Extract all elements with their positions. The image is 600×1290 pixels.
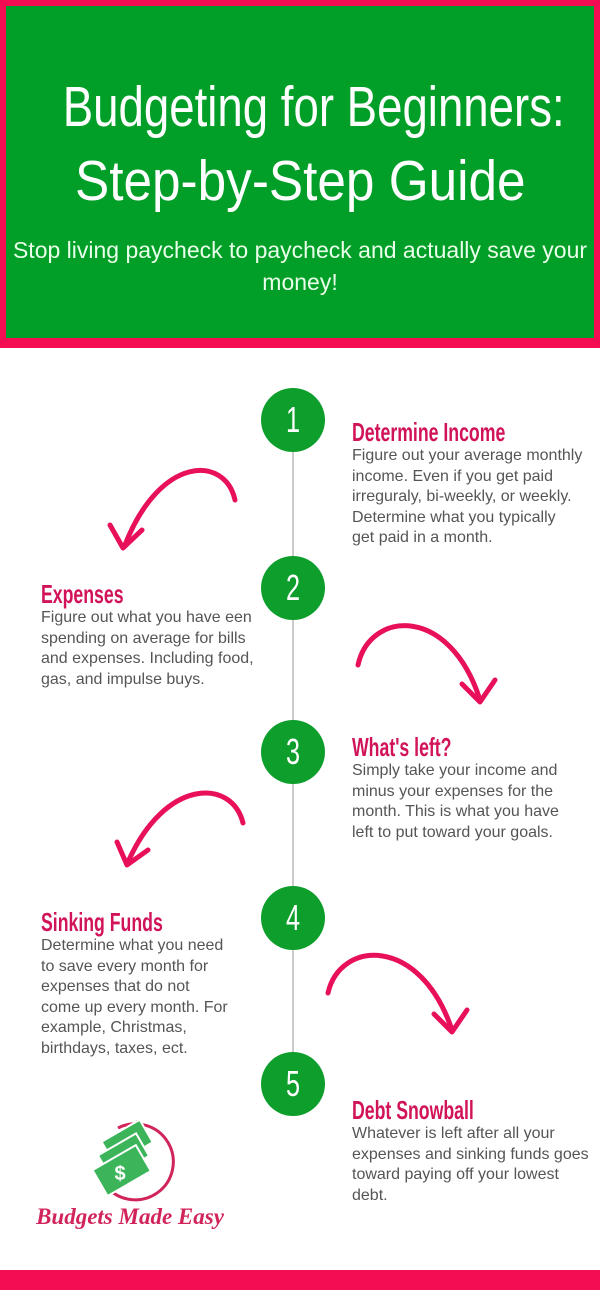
step 4 circle [261, 886, 325, 950]
footer bar [0, 1270, 600, 1290]
arrow 1 [110, 470, 235, 548]
step 3 text: minus your expenses for the [352, 782, 553, 800]
step 3 heading: What's left? [352, 732, 451, 762]
icon: money: $ [114, 1163, 126, 1185]
title [63, 75, 565, 213]
step 1 text [352, 447, 582, 546]
step 1 text: get paid in a month. [352, 529, 493, 546]
step 5 text: expenses and sinking funds goes [352, 1146, 589, 1162]
icon: money [94, 1120, 175, 1202]
step 5 circle: 5 [286, 1063, 300, 1104]
step 2 text: and expenses. Including food, [41, 650, 254, 667]
step 5 heading: Debt Snowball [352, 1095, 474, 1125]
step 4 circle: 4 [286, 897, 300, 938]
step 1 text: irreguraly, bi-weekly, or weekly. [352, 488, 572, 505]
logo text: Budgets Made Easy [36, 1204, 224, 1229]
step 1 circle [261, 388, 325, 452]
arrow 3 [117, 793, 243, 865]
step 4 text: to save every month for [41, 958, 208, 974]
step 4 heading: Sinking Funds [41, 907, 163, 937]
step 4 text: expenses that do not [41, 978, 190, 995]
step 2 text: gas, and impulse buys. [41, 670, 205, 688]
step 2 text [41, 609, 254, 688]
subtitle: Stop living paycheck to paycheck and actually save your money! [13, 237, 587, 295]
step 4 text: Determine what you need [41, 937, 223, 954]
step 2 circle [261, 556, 325, 620]
title: Budgeting for Beginners: [63, 75, 565, 139]
header panel [0, 0, 600, 348]
step 3 text: left to put toward your goals. [352, 824, 553, 840]
step 5 text [352, 1125, 589, 1204]
step 4 text: example, Christmas, [41, 1019, 187, 1036]
step 5 text: debt. [352, 1186, 388, 1204]
title: Step-by-Step Guide [75, 149, 525, 213]
step 4 text: come up every month. For [41, 998, 228, 1016]
step 1 text: income. Even if you get paid [352, 468, 553, 484]
arrow 4 [328, 955, 467, 1032]
step 5 text: toward paying off your lowest [352, 1166, 559, 1183]
step 3 text: Simply take your income and [352, 762, 557, 779]
step 4 text: birthdays, taxes, ect. [41, 1040, 188, 1056]
step 5 text: Whatever is left after all your [352, 1125, 555, 1142]
arrow 2 [358, 626, 495, 702]
timeline line [292, 420, 294, 1085]
step 3 circle [261, 720, 325, 784]
step 2 text: Figure out what you have een [41, 609, 252, 626]
step 1 text: Figure out your average monthly [352, 447, 582, 464]
step 2 heading: Expenses [41, 579, 124, 609]
step 1 heading: Determine Income [352, 417, 505, 447]
step 1 circle: 1 [286, 399, 300, 440]
step 3 text [352, 762, 559, 840]
step 1 text: Determine what you typically [352, 508, 556, 526]
logo [36, 1120, 224, 1229]
step 4 text [41, 937, 228, 1056]
step 5 circle [261, 1052, 325, 1116]
step 3 text: month. This is what you have [352, 803, 559, 820]
step 2 text: spending on average for bills [41, 630, 246, 646]
step 2 circle: 2 [286, 567, 300, 608]
step 3 circle: 3 [286, 731, 300, 772]
